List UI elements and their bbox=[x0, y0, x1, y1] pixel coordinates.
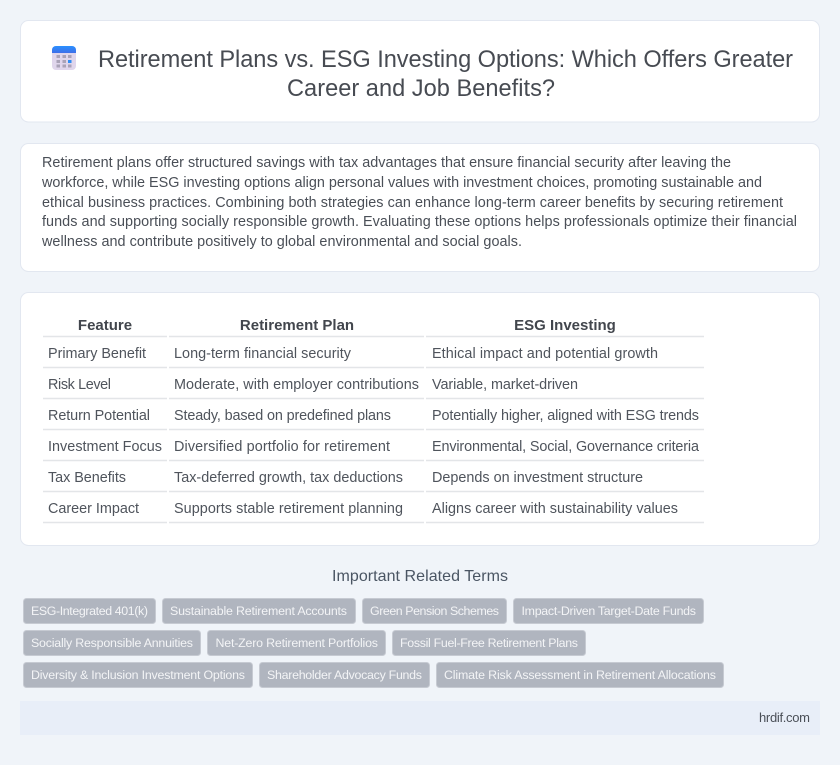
table header: Retirement Plan bbox=[240, 317, 354, 334]
table header bbox=[78, 317, 616, 334]
panel: summary paragraph: Retirement plans offer structured savings with tax advantages that ensure financial security after leaving the bbox=[42, 155, 731, 171]
row: tax benefits: Tax Benefits bbox=[48, 470, 126, 486]
tag: ESG-Integrated 401(k) bbox=[31, 604, 148, 618]
tag list bbox=[24, 598, 724, 688]
row: risk level: Moderate, with employer contributions bbox=[174, 377, 419, 393]
tag: Green Pension Schemes bbox=[370, 604, 499, 618]
panel: summary paragraph: wellness and contribute positively to global environmental and social goals. bbox=[41, 234, 522, 250]
row: tax benefits: Tax-deferred growth, tax deductions bbox=[174, 470, 403, 486]
panel: comparison table bbox=[20, 292, 820, 546]
tag: Socially Responsible Annuities bbox=[31, 636, 193, 650]
row: primary benefit: Primary Benefit bbox=[48, 346, 146, 362]
row: investment focus bbox=[48, 439, 699, 455]
tag bbox=[392, 630, 586, 656]
row: primary benefit: Ethical impact and potential growth bbox=[432, 346, 658, 362]
row: return potential: Potentially higher, aligned with ESG trends bbox=[432, 408, 699, 424]
tag bbox=[436, 662, 724, 688]
row: return potential bbox=[48, 408, 699, 424]
panel: summary paragraph: workforce, while ESG investing options align personal values with investment choices, promoting sustainable and bbox=[41, 175, 762, 191]
footer bar bbox=[20, 701, 820, 735]
panel: title card bbox=[20, 20, 820, 122]
title: Retirement Plans vs. ESG Investing Options: Which Offers Greater bbox=[98, 47, 793, 73]
heading: important related terms: Important Related Terms bbox=[332, 568, 508, 585]
title bbox=[98, 47, 793, 102]
tag bbox=[208, 630, 386, 656]
tag bbox=[24, 630, 200, 656]
table header: Feature bbox=[78, 317, 132, 334]
tag bbox=[260, 662, 430, 688]
row: tax benefits: Depends on investment structure bbox=[432, 470, 643, 486]
tag: Net-Zero Retirement Portfolios bbox=[216, 636, 378, 650]
tag: Impact-Driven Target-Date Funds bbox=[522, 604, 696, 618]
row: tax benefits bbox=[48, 470, 643, 486]
tag bbox=[514, 598, 704, 624]
row: career impact: Career Impact bbox=[48, 501, 139, 517]
tag bbox=[24, 662, 252, 688]
row: risk level bbox=[48, 377, 578, 393]
row: investment focus: Investment Focus bbox=[48, 439, 162, 455]
row: career impact bbox=[48, 501, 678, 517]
row: risk level: Risk Level bbox=[48, 377, 111, 393]
tag: Fossil Fuel-Free Retirement Plans bbox=[400, 636, 578, 650]
title: Career and Job Benefits? bbox=[287, 76, 555, 102]
tag: Diversity & Inclusion Investment Options bbox=[31, 668, 245, 682]
table header: ESG Investing bbox=[514, 317, 616, 334]
icon: calendar bbox=[52, 46, 76, 70]
row: return potential: Steady, based on predefined plans bbox=[174, 408, 391, 424]
row: investment focus: Diversified portfolio for retirement bbox=[174, 439, 390, 455]
footer bar: hrdif.com bbox=[759, 710, 810, 725]
row: career impact: Aligns career with sustainability values bbox=[432, 501, 678, 517]
tag bbox=[162, 598, 356, 624]
row: primary benefit bbox=[48, 346, 658, 362]
tag: Sustainable Retirement Accounts bbox=[170, 604, 347, 618]
tag: Shareholder Advocacy Funds bbox=[267, 668, 422, 682]
row: investment focus: Environmental, Social, Governance criteria bbox=[432, 439, 699, 455]
panel: summary paragraph: funds and supporting socially responsible growth. Evaluating these options helps professionals optimize their financial bbox=[42, 214, 797, 230]
panel: summary paragraph: ethical business practices. Combining both strategies can enhance long-term career benefits by securing retirement bbox=[42, 195, 783, 211]
row: primary benefit: Long-term financial security bbox=[174, 346, 352, 362]
tag: Climate Risk Assessment in Retirement Allocations bbox=[444, 668, 716, 682]
panel: summary paragraph bbox=[20, 144, 820, 272]
tag bbox=[24, 598, 156, 624]
row: career impact: Supports stable retirement planning bbox=[174, 501, 403, 517]
row: return potential: Return Potential bbox=[48, 408, 150, 424]
row: risk level: Variable, market-driven bbox=[432, 377, 578, 393]
tag bbox=[362, 598, 506, 624]
